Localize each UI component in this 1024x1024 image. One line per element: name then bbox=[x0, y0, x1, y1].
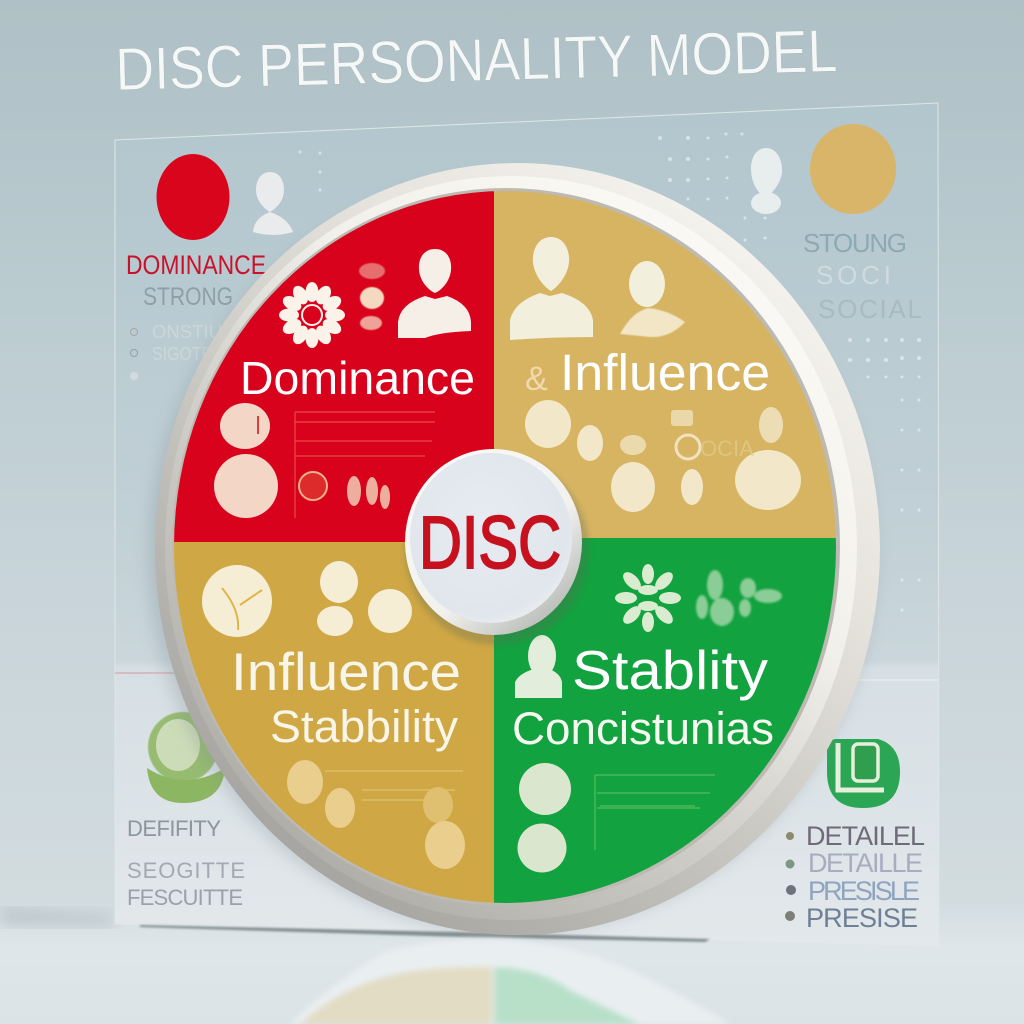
side text: influence list: SOCIAL bbox=[818, 294, 922, 324]
side text: influence list bbox=[803, 228, 922, 324]
side list: conscientiousness: DETAILLE bbox=[808, 848, 923, 878]
faded bullet list left bbox=[130, 322, 222, 380]
quadrant: influence top bbox=[494, 191, 836, 538]
side text: stability list: DEFIFITY bbox=[127, 816, 221, 841]
quadrant: dominance bbox=[174, 191, 494, 542]
icon: conscientiousness badge bbox=[827, 739, 900, 808]
title: DISC PERSONALITY MODEL bbox=[115, 17, 838, 103]
icon: dominance small marks bbox=[359, 263, 385, 330]
faded bullet list left: SIGOTE bbox=[152, 344, 212, 364]
icon: dominance flower bbox=[279, 282, 345, 348]
icon: green circles bbox=[518, 763, 571, 872]
outer ring bbox=[155, 163, 880, 935]
floor reflection bbox=[290, 939, 730, 1024]
side list: conscientiousness: PRESISE bbox=[806, 903, 918, 933]
quadrants bbox=[174, 191, 836, 903]
floor shadow bbox=[0, 908, 115, 927]
hub label: DISC bbox=[419, 501, 561, 584]
panel item: influence gold circle bbox=[810, 124, 896, 214]
icon: influence ampersand mark: & bbox=[525, 360, 548, 398]
chart: green faint table bbox=[595, 775, 715, 850]
heading: conscientiousness: Concistunias bbox=[512, 703, 774, 754]
heading: influence: Influence bbox=[560, 344, 770, 401]
icon: influence blurred body bbox=[620, 308, 685, 337]
disc wheel bbox=[150, 163, 880, 935]
label: side strong: STRONG bbox=[143, 283, 233, 311]
center hub bbox=[405, 449, 582, 635]
side list: conscientiousness: DETAILEL bbox=[806, 821, 925, 851]
icon: green flower bbox=[615, 564, 681, 632]
quadrant: influence stability bbox=[174, 542, 494, 903]
hub shadow bbox=[405, 455, 589, 645]
quadrant: stability bbox=[494, 538, 836, 903]
side text: stability list: FESCUITTE bbox=[127, 885, 243, 910]
icon cluster: lower left gold bbox=[202, 561, 412, 637]
icon cluster: bottom gold bbox=[287, 760, 465, 869]
side text: stability list: SEOGITTE bbox=[127, 858, 245, 883]
heading: stability lower: Stabbility bbox=[270, 701, 459, 752]
floor contact shadow bbox=[140, 925, 710, 942]
faint text: social: OCIA bbox=[700, 436, 754, 461]
icon cluster: influence bbox=[525, 400, 801, 512]
icon: dominance person bbox=[253, 172, 293, 235]
icon: influence person bbox=[751, 148, 782, 214]
icon: dominance bottom marks bbox=[347, 476, 390, 509]
side list: conscientiousness: PRESISLE bbox=[808, 876, 920, 906]
side list: conscientiousness bbox=[785, 821, 925, 933]
faded bullet list left: ONSTIU bbox=[152, 322, 222, 342]
side text: stability list bbox=[127, 816, 245, 910]
heading: influence lower: Influence bbox=[231, 643, 461, 702]
side text: influence list: SOCI bbox=[816, 260, 891, 290]
panel item: dominance red circle bbox=[156, 154, 230, 240]
side text: influence list: STOUNG bbox=[803, 228, 907, 258]
disc drop shadow bbox=[148, 178, 876, 934]
icon: dominance person bbox=[398, 249, 471, 338]
chart: dominance faint lines bbox=[295, 412, 435, 518]
icon: stability side person bbox=[147, 712, 225, 803]
heading: stability: Stablity bbox=[572, 639, 769, 701]
dot pattern bbox=[298, 132, 921, 612]
icon: green person bbox=[515, 635, 562, 698]
icon: influence persons bbox=[510, 237, 665, 340]
icon: green blurred flower bbox=[696, 570, 782, 626]
icon: dominance lower circles bbox=[214, 403, 278, 518]
heading: dominance: Dominance bbox=[240, 352, 475, 404]
label: side dominance: DOMINANCE bbox=[126, 250, 266, 280]
panel: background card bbox=[115, 103, 939, 947]
